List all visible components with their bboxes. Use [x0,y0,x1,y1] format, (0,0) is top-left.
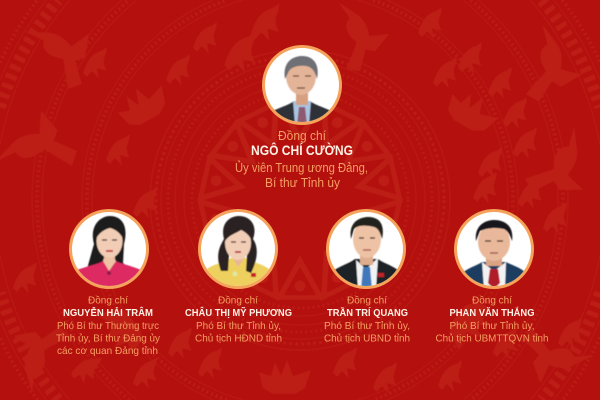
text: Ngô Chí Cường: Đồng chí [278,129,327,143]
portrait: Trần Trí Quang [326,209,406,289]
text: Trần Trí Quang [324,294,410,344]
text: Châu Thị Mỹ Phương: CHÂU THỊ MỸ PHƯƠNG [185,306,292,319]
text: Ngô Chí Cường: Ủy viên Trung ương Đảng, [235,160,368,175]
text: Nguyễn Hải Trâm: Phó Bí thư Thường trực [57,320,159,332]
text: Châu Thị Mỹ Phương: Đồng chí [218,294,258,306]
text: Trần Trí Quang: TRẦN TRÍ QUANG [327,306,408,319]
portrait: Ngô Chí Cường [262,45,342,125]
text: Nguyễn Hải Trâm [56,294,161,357]
text: Phan Văn Thắng: Đồng chí [472,294,512,306]
central star triangles [197,99,403,301]
text: Châu Thị Mỹ Phương: Phó Bí thư Tỉnh ủy, [196,320,281,332]
text: Phan Văn Thắng [436,294,549,344]
text: Trần Trí Quang: Đồng chí [347,294,387,306]
portrait: Phan Văn Thắng [454,209,534,289]
portrait: Châu Thị Mỹ Phương [198,209,278,289]
text: Châu Thị Mỹ Phương [185,294,292,344]
text: Trần Trí Quang: Phó Bí thư Tỉnh ủy, [324,320,410,332]
text: Ngô Chí Cường [235,129,368,190]
text: Trần Trí Quang: Chủ tịch UBND tỉnh [324,332,410,344]
text: Ngô Chí Cường: NGÔ CHÍ CƯỜNG [251,143,353,158]
text: Nguyễn Hải Trâm: các cơ quan Đảng tỉnh [57,345,158,357]
text: Phan Văn Thắng: Phó Bí thư Tỉnh ủy, [450,320,534,332]
text: Nguyễn Hải Trâm: Tỉnh ủy, Bí thư Đảng ủy [56,332,161,344]
text: Nguyễn Hải Trâm: Đồng chí [88,294,128,306]
portrait: Nguyễn Hải Trâm [69,209,149,289]
text: Nguyễn Hải Trâm: NGUYỄN HẢI TRÂM [63,306,153,319]
text: Phan Văn Thắng: PHAN VĂN THẮNG [450,306,534,319]
text: Phan Văn Thắng: Chủ tịch UBMTTQVN tỉnh [436,332,549,344]
text: Châu Thị Mỹ Phương: Chủ tịch HĐND tỉnh [195,332,282,344]
text: Ngô Chí Cường: Bí thư Tỉnh ủy [265,176,341,190]
